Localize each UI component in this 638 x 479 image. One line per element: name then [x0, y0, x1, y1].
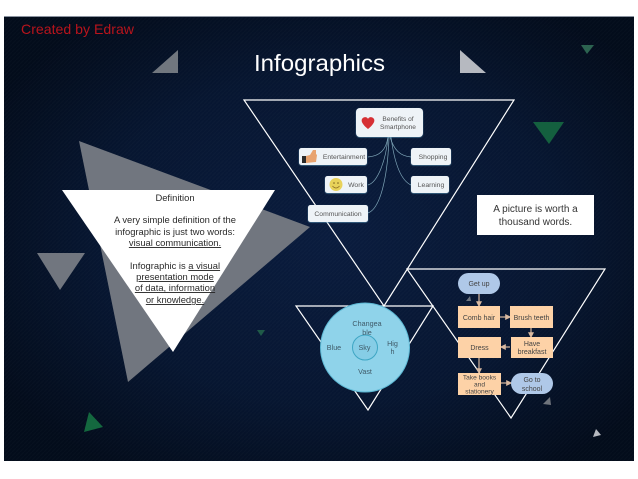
panel: definition: Infographic is a visual — [130, 260, 220, 271]
bubble diagram: sky: Changea — [352, 319, 382, 328]
bubble diagram: sky: Hig — [387, 339, 398, 348]
outline triangle: smartphone benefits — [244, 100, 514, 306]
outline triangle: sky — [296, 306, 433, 410]
watermark: created by Edraw: Created by Edraw — [21, 21, 135, 37]
bubble diagram: sky: Sky — [359, 343, 371, 352]
step: go to school: school — [522, 386, 543, 393]
node: shopping: Shopping — [419, 154, 448, 161]
step: go to school — [511, 373, 553, 394]
connectors — [368, 137, 411, 213]
panel: definition: A very simple definition of the — [114, 214, 236, 225]
node: benefits of smartphone — [356, 108, 423, 137]
decorative triangles — [37, 45, 601, 437]
step: take books and stationery: Take books — [463, 374, 497, 382]
step: take books and stationery: stationery — [465, 388, 494, 396]
flowchart: morning routine — [458, 273, 553, 396]
step: go to school: Go to — [523, 377, 541, 384]
node: entertainment — [299, 148, 367, 165]
node: learning: Learning — [418, 182, 444, 189]
outline triangle: daily routine — [407, 269, 605, 418]
node: learning — [411, 176, 449, 193]
panel: definition: of data, information — [135, 282, 215, 293]
panel: definition — [62, 190, 275, 352]
step: take books and stationery: and — [474, 382, 485, 388]
step: dress: Dress — [470, 345, 489, 352]
step: have breakfast: breakfast — [518, 349, 546, 356]
step: comb hair: Comb hair — [463, 315, 496, 322]
callout: a picture is worth a thousand words: A picture is worth a — [493, 204, 578, 215]
node: communication — [308, 205, 368, 222]
callout: a picture is worth a thousand words: thousand words. — [499, 217, 572, 228]
mind map: benefits of smartphone — [299, 108, 451, 222]
bubble diagram: sky: ble — [362, 328, 372, 337]
node: work: Work — [348, 182, 364, 189]
node: work — [325, 176, 367, 193]
panel: definition: infographic is just two words: — [115, 226, 235, 237]
node: shopping — [411, 148, 451, 165]
step: get up: Get up — [468, 281, 490, 288]
node: entertainment: Entertainment — [323, 154, 365, 161]
callout: a picture is worth a thousand words — [477, 195, 594, 235]
node: communication: Communication — [314, 211, 362, 218]
title: Infographics — [254, 50, 385, 76]
node: benefits of smartphone: Benefits of — [382, 116, 414, 123]
arrows — [479, 294, 531, 383]
panel: definition: presentation mode — [136, 271, 214, 282]
step: have breakfast — [511, 337, 553, 358]
bubble diagram: sky: h — [390, 347, 394, 356]
step: take books and stationery — [458, 373, 501, 396]
panel: definition: or knowledge. — [146, 294, 204, 305]
bubble diagram: sky: Blue — [327, 343, 341, 352]
step: brush teeth: Brush teeth — [514, 315, 550, 322]
node: benefits of smartphone: Smartphone — [380, 124, 416, 131]
panel: definition: Definition — [155, 192, 195, 203]
panel: definition: visual communication. — [129, 237, 221, 248]
large grey triangle behind definition — [79, 141, 310, 382]
bubble diagram: sky — [320, 303, 410, 392]
bubble diagram: sky: Vast — [358, 367, 372, 376]
step: have breakfast: Have — [524, 341, 540, 348]
